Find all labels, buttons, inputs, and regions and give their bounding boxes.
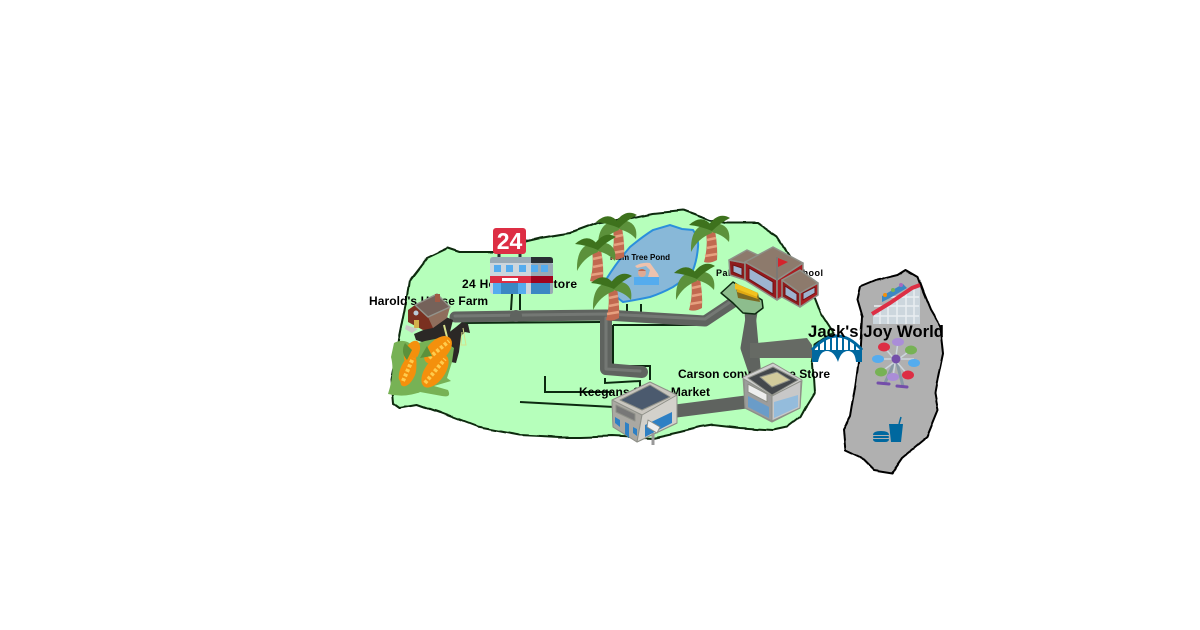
icon: 24 hour store: [490, 228, 553, 294]
icon: palm tree 5: [591, 274, 632, 321]
icon: farm horses: [414, 317, 470, 363]
thin paths: [463, 294, 703, 407]
pond: [607, 225, 698, 302]
palm trees: [575, 213, 730, 321]
gray theme park island: [843, 270, 943, 473]
icon: barn house: [405, 294, 450, 333]
icon: roller coaster: [872, 283, 920, 324]
icon: palm tree 2: [575, 235, 616, 282]
label: Harold's Horse Farm: Harold's Horse Farm: [369, 294, 488, 308]
icon: palm tree 1: [596, 213, 637, 260]
icon: swimmer: [634, 263, 659, 285]
icon: Carson store building: [743, 363, 802, 422]
icon: corn: [388, 331, 457, 396]
icon: school bus yard: [721, 282, 763, 314]
label: Keegans Super Market: Keegans Super Market: [579, 385, 710, 399]
icon: palm tree 3: [689, 216, 730, 263]
icon: palm tree 4: [674, 264, 715, 311]
label: school: Palm Tree High School: [716, 268, 823, 278]
icon: ferris wheel: [872, 338, 920, 387]
road network: [455, 300, 812, 411]
icon: school building: [729, 247, 818, 307]
green island: [391, 210, 833, 438]
icon: food and drink: [873, 417, 903, 442]
icon: bridge: [812, 335, 862, 362]
icon: 24 hour store: 24: [497, 228, 522, 254]
icon: Keegans store building: [612, 382, 677, 445]
label: 24 Hour store: 24 Hour Drug Store: [462, 277, 577, 291]
label: Jack's Joy World: Jack's Joy World: [808, 322, 944, 341]
label: Carson convenience Store: Carson convenience Store: [678, 367, 830, 381]
label: Palm Tree Pond: Palm Tree Pond: [610, 253, 670, 262]
